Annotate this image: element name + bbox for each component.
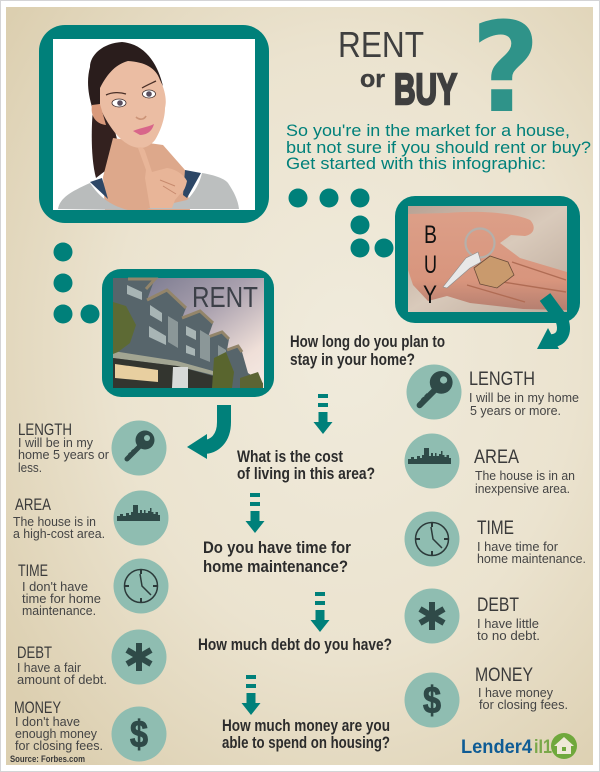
buy column: debt: to no debt. <box>477 629 540 643</box>
woman photo <box>58 42 239 210</box>
question: money: How much money are you <box>222 716 390 735</box>
logo: Lender4: iI1 <box>534 737 552 758</box>
photo frame: rent <box>102 269 274 397</box>
rent column: length: home 5 years or <box>18 448 109 462</box>
title <box>338 24 457 114</box>
rent column: length <box>18 420 166 476</box>
rent column: time <box>18 558 168 618</box>
rent column: debt: DEBT <box>17 643 52 662</box>
buy label <box>423 221 437 309</box>
question: debt: How much debt do you have? <box>198 635 392 654</box>
dots to rent frame <box>54 242 100 324</box>
rent column: length: I will be in my <box>18 436 94 450</box>
question: cost of living: of living in this area? <box>237 464 375 483</box>
rent column: time: time for home <box>22 592 101 606</box>
buy column: time <box>404 512 586 566</box>
buy column: length: I will be in my home <box>469 391 579 405</box>
question: time: home maintenance? <box>203 557 348 576</box>
rent column: length: LENGTH <box>18 420 72 439</box>
rent column: money: MONEY <box>14 698 61 717</box>
source: Source: Forbes.com <box>10 754 85 765</box>
rent column: money: for closing fees. <box>15 739 103 753</box>
question: time: Do you have time for <box>203 538 351 557</box>
buy column: length: 5 years or more. <box>470 404 561 418</box>
intro text: So you're in the market for a house, <box>286 121 570 140</box>
buy column: area: The house is in an <box>475 469 575 483</box>
logo: Lender4 <box>461 733 577 759</box>
rent column: money: I don't have <box>15 715 80 729</box>
buy column: debt: DEBT <box>477 595 519 616</box>
arrow: buy to right column <box>537 297 563 349</box>
arrow: down 2 <box>246 493 264 533</box>
rent column: length: less. <box>18 461 42 475</box>
buy label: U <box>424 251 437 279</box>
buy label: B <box>424 221 437 249</box>
buy column: time: home maintenance. <box>477 552 586 566</box>
rent column: money <box>14 698 166 762</box>
buy column: money: I have money <box>478 686 554 700</box>
buy column: area <box>404 434 575 496</box>
buy column: debt: I have little <box>477 617 539 631</box>
question: money: able to spend on housing? <box>222 733 390 752</box>
rent column: area <box>13 490 168 546</box>
rent column: time: maintenance. <box>22 604 96 618</box>
question: time <box>203 538 351 576</box>
title: BUY <box>394 65 457 114</box>
rent column: area: AREA <box>15 495 52 514</box>
buy column: money <box>404 665 568 728</box>
question: cost of living <box>237 447 375 483</box>
arrow: down 1 <box>314 394 332 434</box>
rent column: area: a high-cost area. <box>13 527 105 541</box>
intro text: Get started with this infographic: <box>286 154 546 173</box>
buy column: time: I have time for <box>477 540 558 554</box>
question: how long: stay in your home? <box>290 350 415 369</box>
buy column: length <box>406 364 579 420</box>
buy column: money: $ <box>423 680 441 722</box>
question: how long <box>290 332 445 369</box>
intro text: but not sure if you should rent or buy? <box>286 138 591 157</box>
photo frame: buy <box>395 196 580 323</box>
rent column: debt <box>17 630 166 687</box>
buy column: time: TIME <box>477 518 514 539</box>
buy column: money: MONEY <box>475 665 533 686</box>
arrow: down 3 <box>310 592 330 632</box>
question: money <box>222 716 390 752</box>
title: RENT <box>338 24 424 65</box>
rent column: debt: I have a fair <box>17 661 81 675</box>
rent label: RENT <box>192 282 258 314</box>
arrow: down 4 <box>242 675 260 715</box>
buy column: area: inexpensive area. <box>475 482 570 496</box>
intro text <box>286 121 591 173</box>
title: or <box>360 66 385 93</box>
buy column: money: for closing fees. <box>479 698 568 712</box>
rent column: time: I don't have <box>22 580 88 594</box>
rent column: money: $ <box>130 714 148 756</box>
buy column: area: AREA <box>474 447 519 468</box>
question: cost of living: What is the cost <box>237 447 343 466</box>
buy label: Y <box>423 281 437 309</box>
arrow: rent to left column <box>187 405 224 459</box>
rent column: time: TIME <box>18 561 48 580</box>
buy column: debt <box>404 588 540 644</box>
rent column: area: The house is in <box>13 515 96 529</box>
logo: Lender4: Lender4 <box>461 737 532 758</box>
photo frame: thinking woman <box>39 25 269 223</box>
rent column: debt: amount of debt. <box>17 673 107 687</box>
question: how long: How long do you plan to <box>290 332 445 351</box>
icon: question mark: ? <box>471 0 540 141</box>
rent column: money: enough money <box>15 727 98 741</box>
buy column: length: LENGTH <box>469 369 535 390</box>
dots to buy frame <box>288 188 394 258</box>
